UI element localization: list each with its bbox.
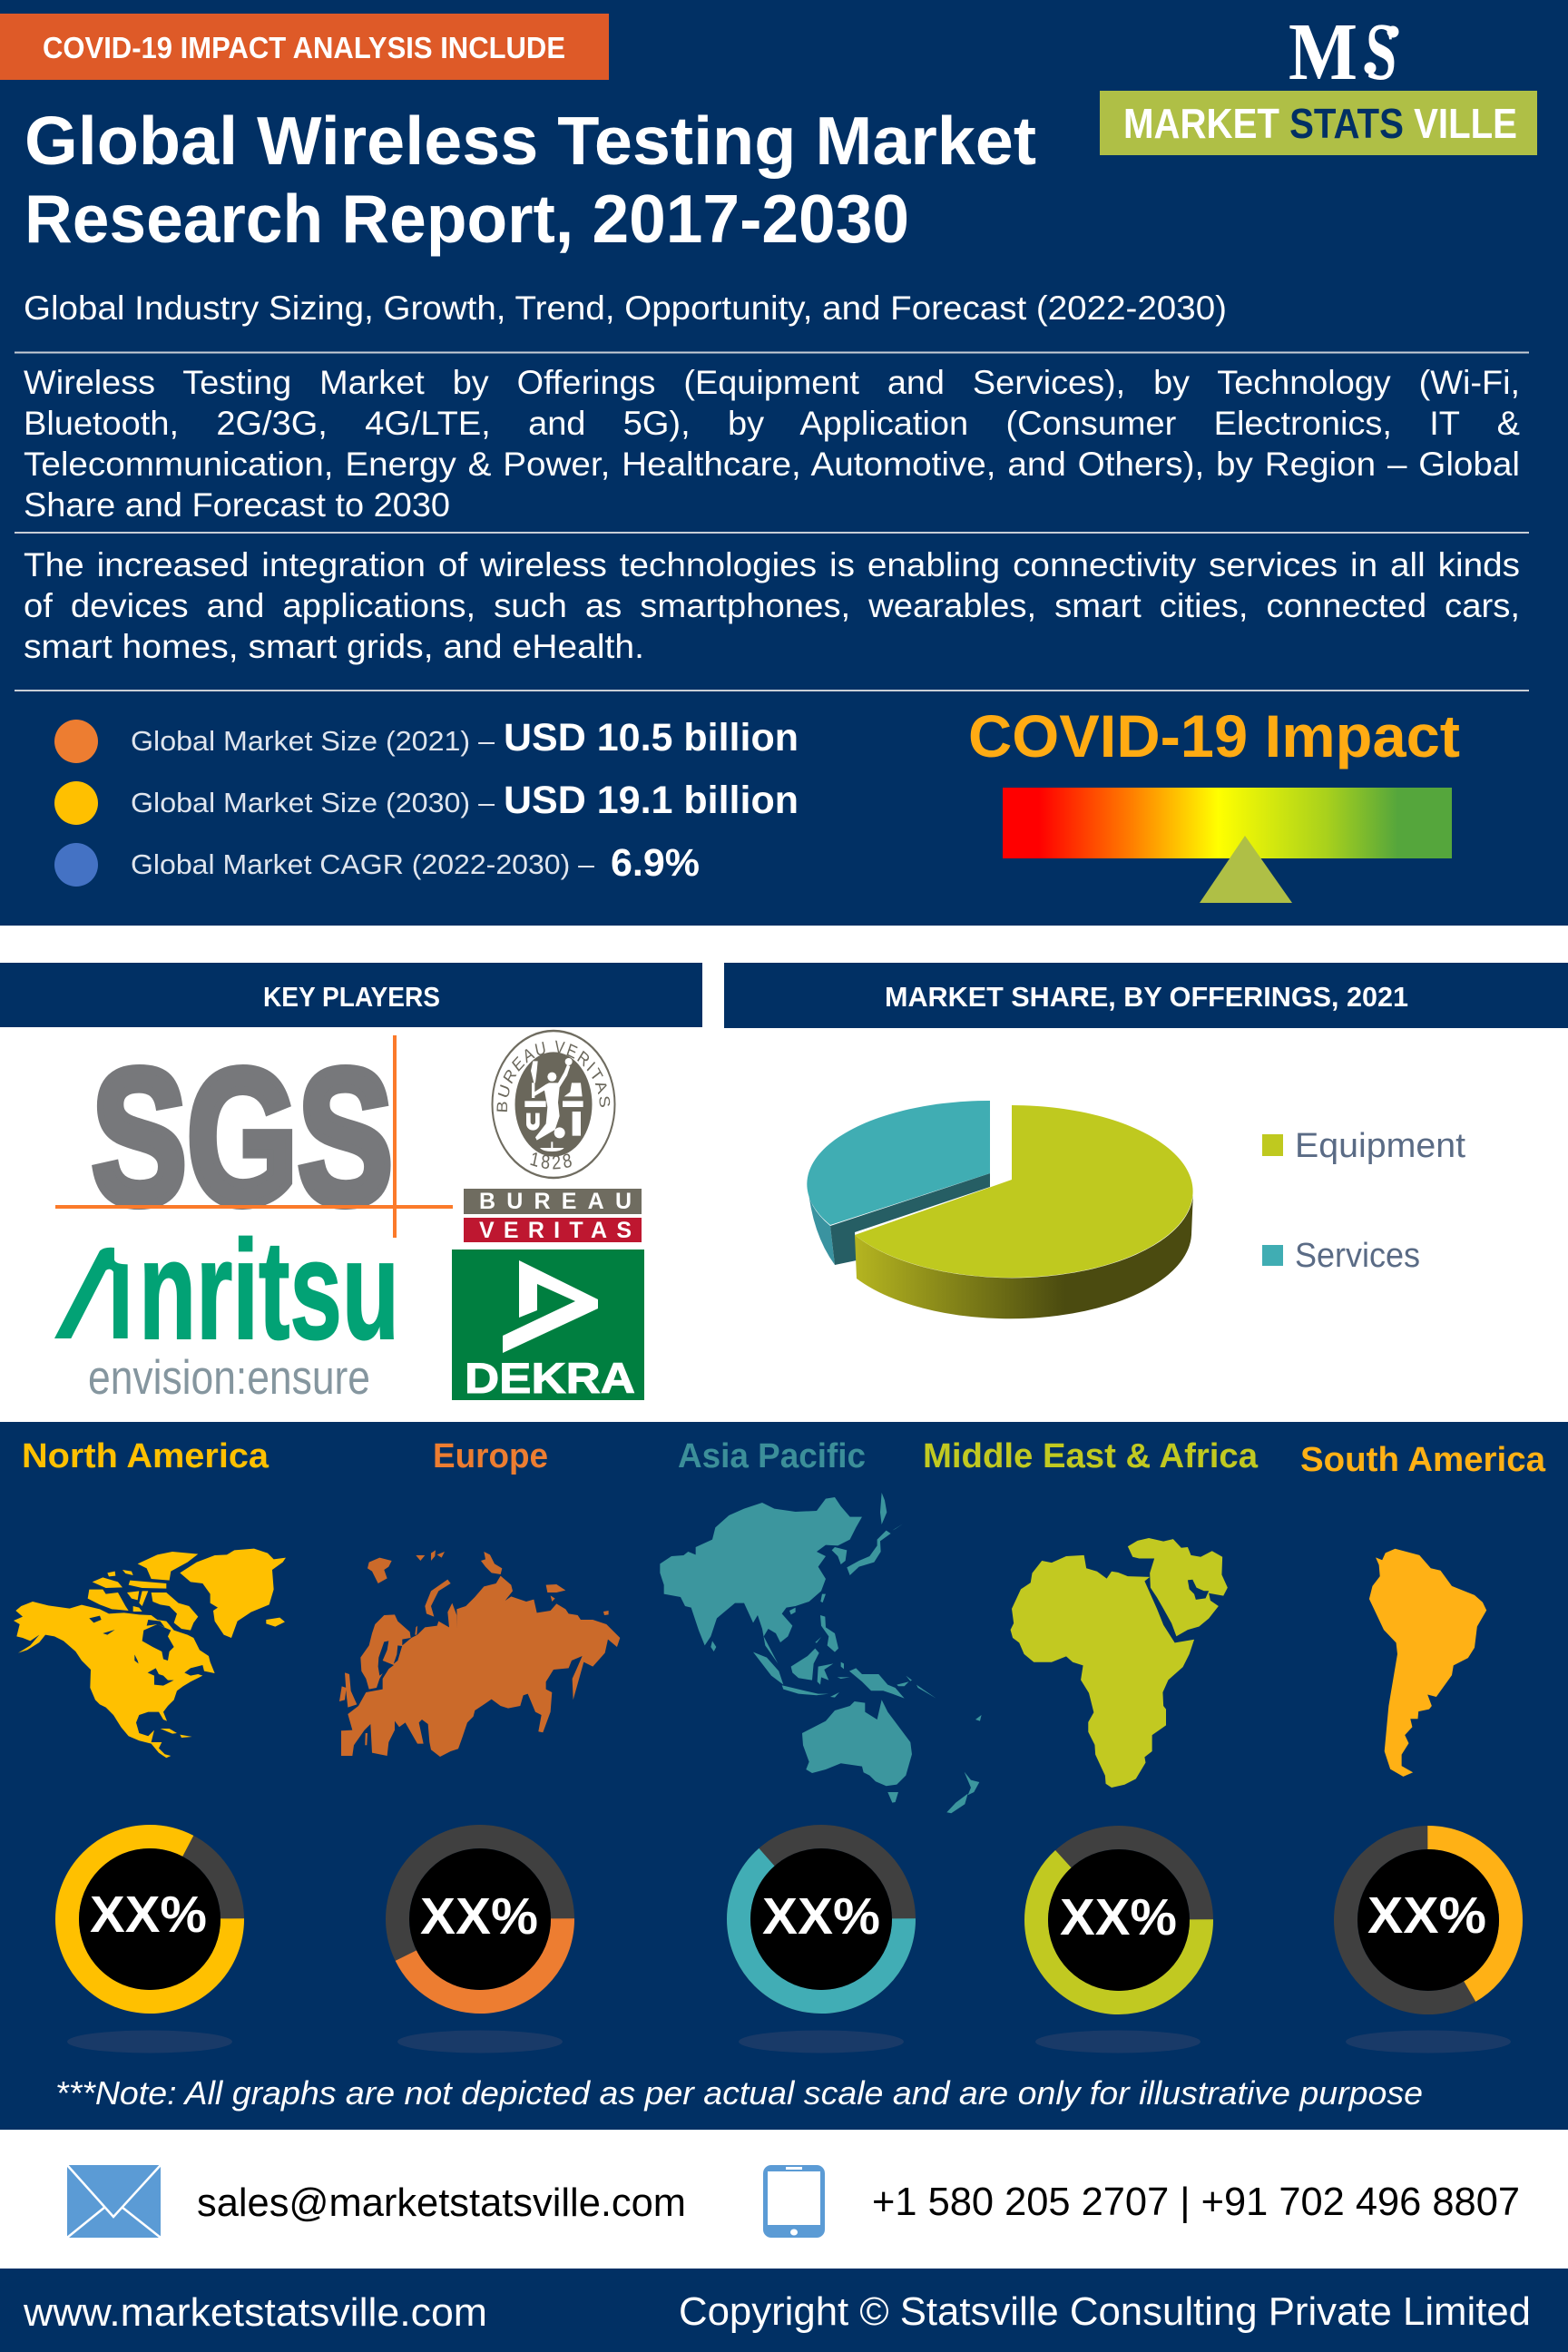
title: Global Wireless Testing Market bbox=[24, 103, 1036, 179]
stat: CAGR: Global Market CAGR (2022-2030) – bbox=[131, 848, 595, 880]
logo: DEKRA: DEKRA bbox=[465, 1354, 635, 1402]
email: sales@marketstatsville.com bbox=[197, 2180, 686, 2225]
stat: market size 2030: Global Market Size (2030) – bbox=[131, 787, 495, 818]
market description paragraph: The increased integration of wireless technologies is enabling connectivity services in all kinds bbox=[24, 546, 1520, 583]
services inner wall bbox=[830, 1173, 990, 1265]
key players header bbox=[0, 963, 702, 1027]
donut: North America: XX% bbox=[90, 1886, 207, 1944]
covid badge: COVID-19 IMPACT ANALYSIS INCLUDE bbox=[43, 31, 565, 64]
logo: Market Stats Ville: M bbox=[1289, 7, 1357, 97]
market description paragraph bbox=[24, 546, 1520, 665]
covid badge bbox=[0, 14, 609, 80]
seal: BUREAU VERITAS bbox=[496, 1040, 610, 1112]
logo: Market Stats Ville bbox=[1100, 7, 1537, 155]
map: South America bbox=[1369, 1549, 1486, 1777]
title bbox=[24, 103, 1036, 257]
equipment side bbox=[855, 1191, 1193, 1318]
region labels bbox=[22, 1437, 1546, 1479]
report scope paragraph: Telecommunication, Energy & Power, Healthcare, Automotive, and Others), by Region – Global bbox=[24, 446, 1520, 483]
footer bar: www.marketstatsville.com bbox=[23, 2290, 487, 2335]
stat: market size 2030: USD 19.1 billion bbox=[504, 779, 799, 822]
donut: Middle East and Africa bbox=[1035, 1838, 1201, 2053]
title: Research Report, 2017-2030 bbox=[24, 181, 909, 257]
report scope paragraph: Wireless Testing Market by Offerings (Equipment and Services), by Technology (Wi-Fi, bbox=[24, 364, 1520, 401]
region labels: North America bbox=[22, 1437, 270, 1475]
region labels: Europe bbox=[433, 1437, 548, 1475]
seal: 1828 bbox=[530, 1152, 572, 1169]
key stats bbox=[54, 716, 799, 887]
report scope paragraph: Share and Forecast to 2030 bbox=[24, 486, 450, 524]
logo: Anritsu: nritsu bbox=[139, 1211, 399, 1368]
region labels: South America bbox=[1300, 1441, 1546, 1479]
footer bar: Copyright © Statsville Consulting Private Limited bbox=[679, 2289, 1531, 2334]
donut: Europe: XX% bbox=[420, 1887, 538, 1945]
donut: Asia Pacific bbox=[739, 1837, 904, 2053]
logo: Bureau Veritas: BUREAU bbox=[479, 1189, 632, 1214]
seal figure bbox=[524, 1058, 583, 1152]
region labels: Middle East & Africa bbox=[923, 1437, 1259, 1475]
donut: North America bbox=[67, 1837, 232, 2053]
impact gradient gauge bbox=[1003, 788, 1452, 903]
market share header: MARKET SHARE, BY OFFERINGS, 2021 bbox=[885, 981, 1408, 1013]
seal bbox=[492, 1029, 615, 1180]
equipment top bbox=[855, 1105, 1193, 1278]
map: North America bbox=[14, 1549, 286, 1758]
services top bbox=[807, 1101, 990, 1225]
key players header: KEY PLAYERS bbox=[263, 981, 440, 1013]
logo: Anritsu: envision:ensure bbox=[88, 1351, 370, 1405]
logo: Market Stats Ville: MARKET STATS VILLE bbox=[1123, 100, 1517, 147]
logo: Bureau Veritas bbox=[464, 1029, 642, 1243]
header background panel bbox=[0, 0, 1568, 926]
3D pie chart bbox=[807, 1101, 1193, 1318]
donut: Middle East and Africa: XX% bbox=[1060, 1888, 1177, 1946]
map: Middle East and Africa bbox=[1011, 1538, 1228, 1788]
pie legend: Services bbox=[1295, 1237, 1420, 1275]
services side bbox=[808, 1184, 835, 1265]
stat: market size 2021: Global Market Size (2021) – bbox=[131, 725, 495, 757]
logo: Bureau Veritas: VERITAS bbox=[479, 1218, 632, 1243]
logo: DEKRA bbox=[452, 1250, 644, 1402]
pie legend bbox=[1262, 1127, 1465, 1275]
logo: SGS: SGS bbox=[92, 1029, 393, 1244]
region labels: Asia Pacific bbox=[678, 1437, 866, 1475]
market share header bbox=[724, 963, 1568, 1028]
report scope paragraph bbox=[24, 364, 1520, 524]
stat: CAGR: 6.9% bbox=[611, 841, 700, 885]
donut: South America: XX% bbox=[1367, 1886, 1486, 1945]
note: ***Note: All graphs are not depicted as per actual scale and are only for illustrative purpose bbox=[55, 2074, 1423, 2112]
logo: Anritsu bbox=[54, 1211, 399, 1405]
donut: Europe bbox=[397, 1837, 563, 2053]
regional background panel bbox=[0, 1422, 1568, 2130]
stat: market size 2030 bbox=[54, 779, 799, 825]
stat: market size 2021: USD 10.5 billion bbox=[504, 716, 799, 760]
map: Europe bbox=[339, 1550, 620, 1757]
phone numbers: +1 580 205 2707 | +91 702 496 8807 bbox=[872, 2180, 1520, 2224]
icon: envelope bbox=[67, 2165, 161, 2238]
covid impact heading: COVID-19 Impact bbox=[968, 702, 1460, 769]
icon: phone bbox=[763, 2165, 825, 2238]
pie legend: Equipment bbox=[1295, 1127, 1465, 1165]
market description paragraph: of devices and applications, such as smartphones, wearables, smart cities, connected cars, bbox=[24, 587, 1520, 624]
logo: Market Stats Ville: S bbox=[1366, 7, 1396, 97]
stat: CAGR bbox=[54, 841, 700, 887]
stat: market size 2021 bbox=[54, 716, 799, 763]
donut: Asia Pacific: XX% bbox=[762, 1887, 880, 1945]
subtitle: Global Industry Sizing, Growth, Trend, Opportunity, and Forecast (2022-2030) bbox=[24, 289, 1227, 327]
footer bar bbox=[0, 2269, 1568, 2352]
map: Asia Pacific bbox=[660, 1493, 982, 1813]
report scope paragraph: Bluetooth, 2G/3G, 4G/LTE, and 5G), by Application (Consumer Electronics, IT & bbox=[24, 405, 1520, 442]
market description paragraph: smart homes, smart grids, and eHealth. bbox=[24, 628, 644, 665]
donut: South America bbox=[1346, 1838, 1511, 2053]
